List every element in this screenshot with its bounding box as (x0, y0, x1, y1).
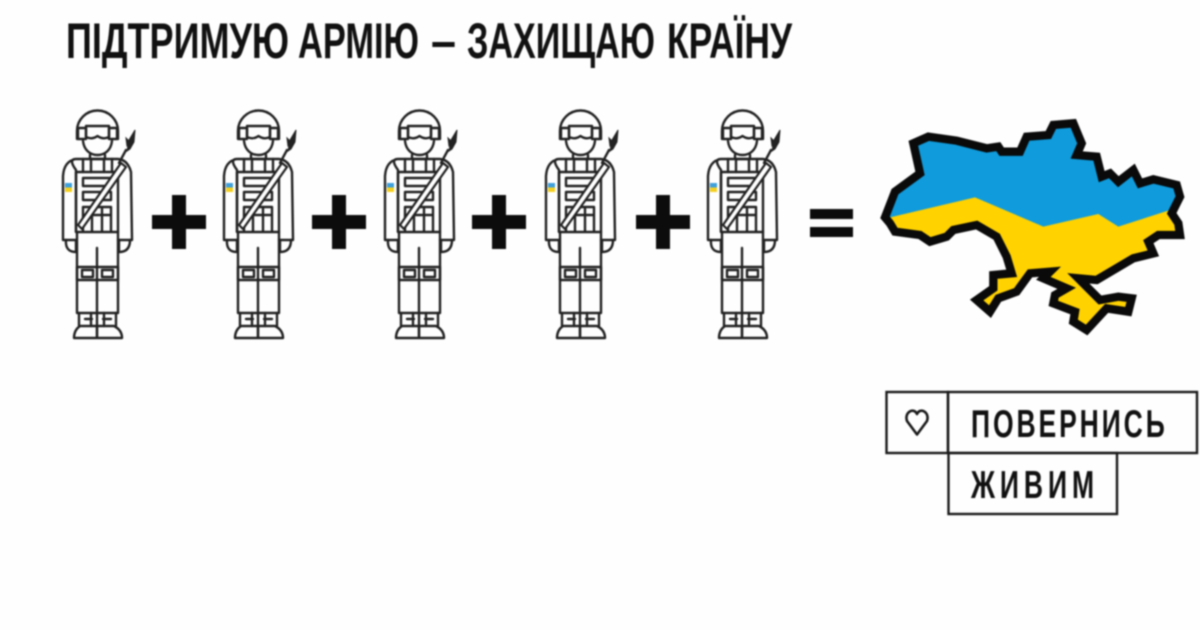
icon: soldier 4 (546, 110, 618, 338)
map of Ukraine (870, 110, 1190, 330)
title: – (431, 13, 456, 69)
icon: plus 1 (152, 195, 206, 249)
title: ЗАХИЩАЮ (467, 13, 655, 69)
title (66, 13, 793, 69)
logo: Повернись живим (886, 392, 1197, 514)
icon: plus 4 (636, 195, 690, 249)
title: ПІДТРИМУЮ (66, 13, 289, 69)
icon: plus 2 (312, 195, 366, 249)
icon: soldier 3 (385, 110, 457, 338)
icon: plus 3 (472, 195, 526, 249)
icon: equals sign (810, 209, 853, 237)
logo text: top line: ПОВЕРНИСЬ (971, 403, 1165, 446)
icon: heart (906, 411, 928, 434)
icon: soldier 5 (708, 110, 780, 338)
logo text: bottom line: ЖИВИМ (970, 464, 1094, 507)
icon: soldier 1 (63, 110, 135, 338)
title: АРМІЮ (298, 13, 419, 69)
title: КРАЇНУ (667, 13, 793, 69)
icon: soldier 2 (224, 110, 296, 338)
